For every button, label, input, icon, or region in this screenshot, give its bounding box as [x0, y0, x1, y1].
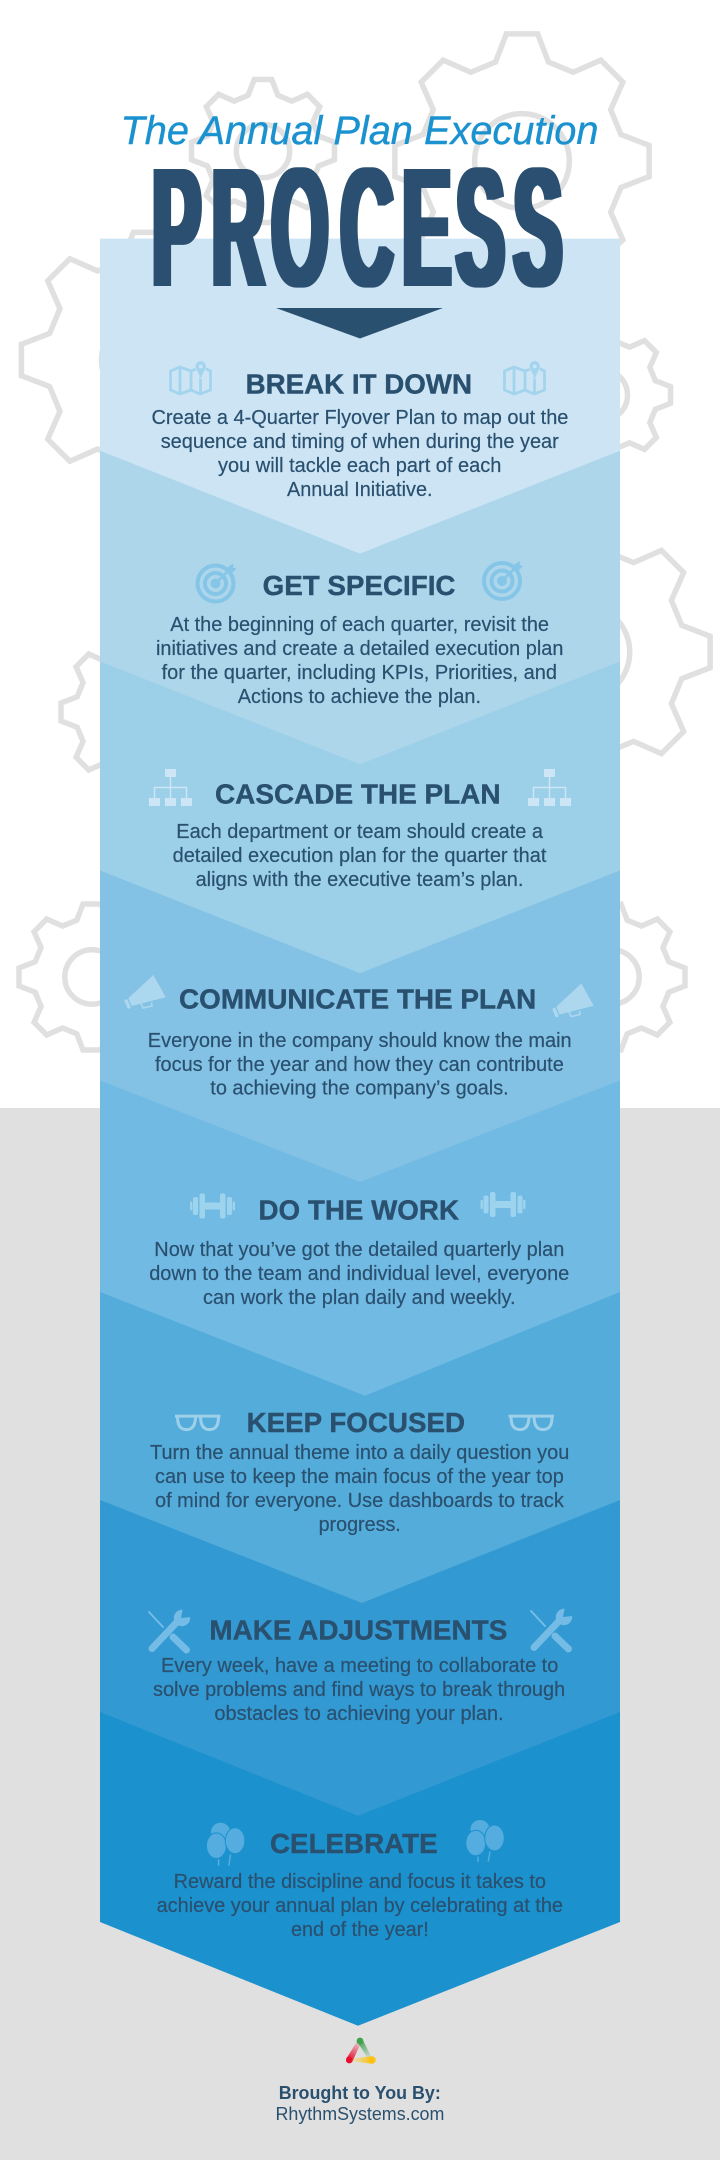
text: do the work body: can work the plan daily and weekly.: [203, 1287, 516, 1309]
panel: break it down: [100, 239, 620, 554]
text: cascade the plan body: detailed execution plan for the quarter that: [173, 845, 547, 867]
panel: keep focused: [100, 1292, 620, 1603]
text: keep focused body: Turn the annual theme into a daily question you: [150, 1442, 569, 1464]
heading: break it down: BREAK IT DOWN: [246, 369, 472, 400]
text: make adjustments body: obstacles to achieving your plan.: [214, 1703, 504, 1725]
text: keep focused body: [150, 1442, 569, 1536]
heading: communicate the plan: COMMUNICATE THE PLAN: [179, 984, 536, 1015]
text: do the work body: Now that you’ve got the detailed quarterly plan: [154, 1239, 564, 1261]
text: communicate the plan body: to achieving the company’s goals.: [210, 1078, 509, 1100]
icon: map right: [504, 361, 544, 394]
icon: balloons right: [466, 1820, 504, 1862]
icon: glasses left: [175, 1416, 220, 1430]
text: celebrate body: Reward the discipline and focus it takes to: [174, 1871, 546, 1893]
icon: megaphone right: [554, 984, 594, 1016]
heading: do the work: DO THE WORK: [258, 1195, 459, 1226]
text: communicate the plan body: [148, 1030, 572, 1100]
heading: celebrate: CELEBRATE: [270, 1828, 438, 1859]
text: celebrate body: end of the year!: [291, 1919, 429, 1941]
icon: dumbbell left: [190, 1194, 235, 1218]
text: make adjustments body: [153, 1655, 565, 1725]
text: break it down body: sequence and timing of when during the year: [161, 431, 559, 453]
arrow under title: [276, 308, 443, 338]
text: break it down body: Create a 4-Quarter Flyover Plan to map out the: [152, 407, 568, 429]
icon: map left: [170, 361, 210, 394]
icon: megaphone left: [126, 975, 166, 1008]
title: the annual plan execution: The Annual Plan Execution: [120, 109, 598, 153]
text: break it down body: Annual Initiative.: [287, 479, 432, 501]
text: get specific body: initiatives and create a detailed execution plan: [156, 638, 563, 660]
panel: make adjustments: [100, 1500, 620, 1816]
text: break it down body: you will tackle each part of each: [218, 455, 501, 477]
text: keep focused body: can use to keep the main focus of the year top: [155, 1466, 564, 1488]
heading: make adjustments: MAKE ADJUSTMENTS: [209, 1615, 507, 1646]
footer text: Brought to You By:: [279, 2083, 441, 2103]
panel: cascade the plan: [100, 661, 620, 973]
text: get specific body: Actions to achieve the plan.: [238, 686, 481, 708]
text: make adjustments body: Every week, have a meeting to collaborate to: [161, 1655, 558, 1677]
footer text: RhythmSystems.com: [276, 2104, 444, 2124]
title: process: PROCESS: [152, 133, 562, 322]
text: do the work body: [149, 1239, 569, 1309]
text: cascade the plan body: [173, 821, 547, 891]
heading: get specific: GET SPECIFIC: [263, 570, 456, 601]
panel: communicate the plan: [100, 870, 620, 1182]
text: communicate the plan body: focus for the year and how they can contribute: [155, 1054, 564, 1076]
heading: cascade the plan: CASCADE THE PLAN: [215, 779, 500, 810]
footer logo: [346, 2038, 376, 2064]
text: get specific body: At the beginning of each quarter, revisit the: [170, 614, 549, 636]
text: do the work body: down to the team and individual level, everyone: [149, 1263, 569, 1285]
icon: target right: [484, 561, 523, 599]
panel: get specific: [100, 451, 620, 764]
icon: tools right: [531, 1607, 575, 1649]
text: celebrate body: [157, 1871, 563, 1941]
icon: target left: [198, 564, 236, 602]
icon: balloons left: [206, 1823, 245, 1866]
footer text: [276, 2083, 444, 2124]
heading: keep focused: KEEP FOCUSED: [247, 1407, 465, 1438]
panel: do the work: [100, 1080, 620, 1396]
text: cascade the plan body: Each department or team should create a: [176, 821, 544, 843]
panel: celebrate: [100, 1712, 620, 2026]
icon: dumbbell right: [480, 1192, 526, 1217]
text: celebrate body: achieve your annual plan by celebrating at the: [157, 1895, 563, 1917]
text: keep focused body: progress.: [319, 1514, 401, 1536]
text: get specific body: [156, 614, 563, 708]
icon: tools left: [149, 1608, 193, 1650]
icon: org chart left: [149, 769, 192, 806]
text: keep focused body: of mind for everyone. Use dashboards to track: [155, 1490, 565, 1512]
text: make adjustments body: solve problems and find ways to break through: [153, 1679, 565, 1701]
text: communicate the plan body: Everyone in the company should know the main: [148, 1030, 572, 1052]
text: cascade the plan body: aligns with the executive team’s plan.: [196, 869, 523, 891]
icon: glasses right: [508, 1416, 554, 1430]
text: break it down body: [152, 407, 568, 501]
background gears: [19, 34, 710, 1050]
text: get specific body: for the quarter, including KPIs, Priorities, and: [162, 662, 557, 684]
icon: org chart right: [528, 769, 571, 806]
